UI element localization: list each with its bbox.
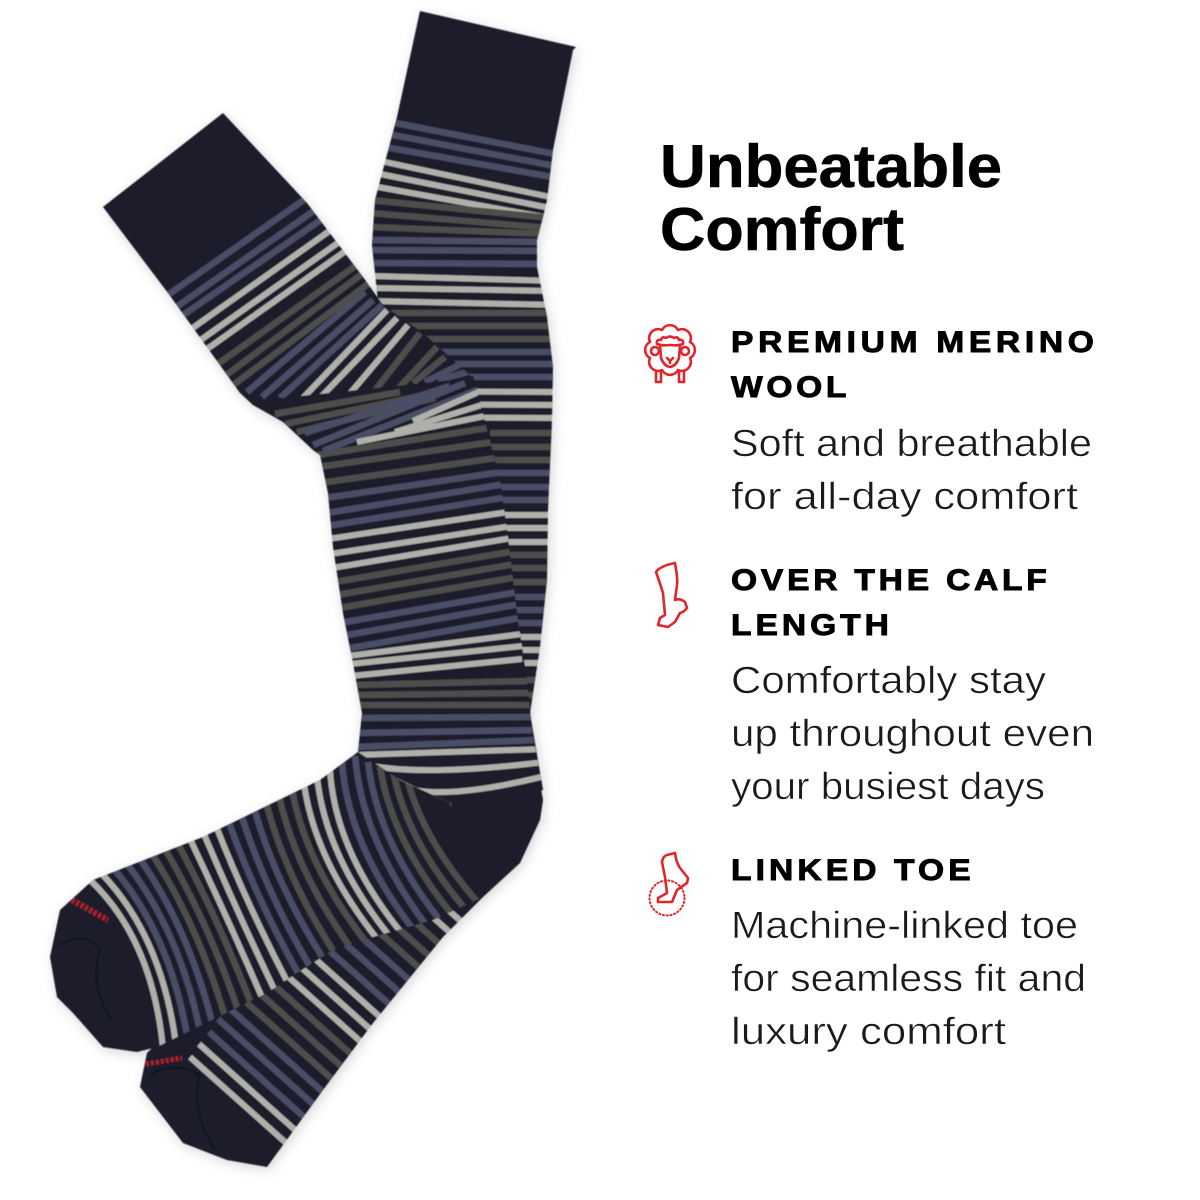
description: merino xyxy=(731,423,1092,518)
description: calf: up throughout even xyxy=(731,713,1094,755)
front sock lower leg xyxy=(240,376,545,803)
feature: linked toe xyxy=(650,853,1086,1053)
description: calf: Comfortably stay xyxy=(731,660,1046,702)
icon: foot with dotted toe circle xyxy=(650,853,688,916)
description: merino: for all-day comfort xyxy=(731,476,1079,518)
product photo: pair of striped socks xyxy=(50,11,576,1167)
description: calf xyxy=(731,660,1094,808)
heading: linked toe: LINKED TOE xyxy=(731,853,971,887)
back sock foot xyxy=(140,800,490,1167)
title: Comfort xyxy=(660,196,904,263)
feature: premium merino wool xyxy=(645,325,1094,518)
feature: over the calf length xyxy=(656,563,1094,808)
description: merino: Soft and breathable xyxy=(731,423,1092,465)
heading: over the calf length: OVER THE CALF xyxy=(731,563,1047,597)
back sock cuff and leg xyxy=(370,11,576,810)
heading: premium merino wool: PREMIUM MERINO xyxy=(731,325,1094,359)
icon: sheep xyxy=(645,325,695,382)
icon: calf-length leg xyxy=(656,563,687,627)
front sock foot and toe xyxy=(50,752,483,1052)
red woven toe marking, front sock xyxy=(72,900,108,920)
red woven toe marking, back sock xyxy=(146,1058,182,1064)
heading: premium merino wool: WOOL xyxy=(731,370,846,404)
description: linked toe xyxy=(731,905,1086,1053)
heading: premium merino wool xyxy=(731,325,1094,404)
heading: over the calf length: LENGTH xyxy=(731,608,889,642)
front sock cuff and upper leg xyxy=(103,113,475,400)
front sock heel xyxy=(450,783,543,897)
title xyxy=(660,133,1002,263)
description: linked toe: for seamless fit and xyxy=(731,958,1086,1000)
title: Unbeatable xyxy=(660,133,1002,200)
heading: over the calf length xyxy=(731,563,1047,642)
description: linked toe: luxury comfort xyxy=(731,1011,1006,1053)
description: linked toe: Machine-linked toe xyxy=(731,905,1078,947)
description: calf: your busiest days xyxy=(731,766,1045,808)
